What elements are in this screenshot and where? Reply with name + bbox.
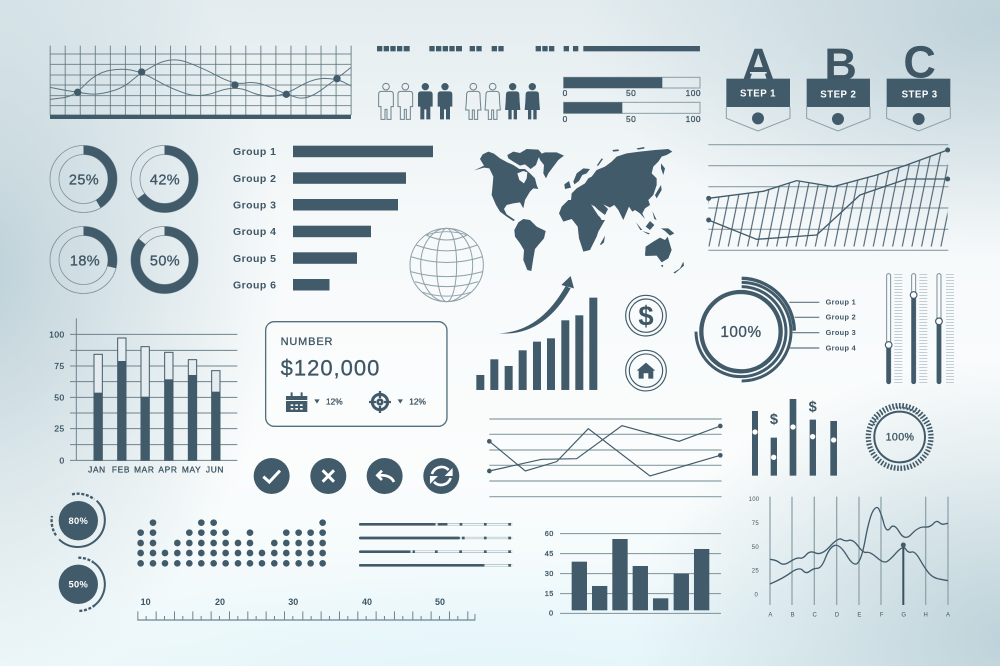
donut 50%	[131, 226, 198, 294]
australia	[645, 237, 672, 268]
scandinavia	[573, 168, 590, 184]
donut 18%: 18%	[70, 254, 100, 270]
horizontal group bar chart: Group 1	[233, 146, 276, 158]
ruler scale: 30	[288, 597, 298, 607]
hatched area line chart	[706, 143, 950, 250]
crossing line chart	[487, 419, 723, 497]
ruler scale	[137, 597, 475, 620]
donut 18%	[50, 226, 117, 294]
smooth curve chart: 75	[752, 521, 759, 527]
arrow	[499, 276, 574, 334]
icon: men outlined	[379, 83, 413, 119]
growth bar chart with arrow	[476, 276, 597, 390]
column dots 9 to 12	[235, 529, 278, 567]
eurasia africa oceania	[559, 147, 684, 273]
progress bars 0 50 100: 50	[626, 88, 636, 98]
donut 42%	[131, 146, 198, 212]
people pictogram	[379, 83, 540, 119]
stacked monthly bar chart: 0	[60, 455, 65, 465]
number card: NUMBER	[281, 336, 333, 348]
radial 100 percent chart with groups: Group 1	[826, 298, 856, 307]
number card: 12%	[326, 397, 343, 407]
column dots 5 to 8	[186, 519, 229, 567]
radial tick gauge 100 percent: 100%	[886, 432, 914, 444]
dollar bar chart: $	[809, 399, 817, 415]
horizontal group bar chart: Group 6	[233, 280, 276, 292]
column bar chart 0 to 60: 45	[545, 549, 554, 558]
stacked monthly bar chart: 100	[49, 329, 65, 339]
small percent circles	[52, 494, 105, 611]
north america	[474, 152, 538, 221]
smooth curve chart: A	[768, 613, 772, 619]
donut charts	[50, 146, 198, 294]
donut 50%: 50%	[150, 254, 180, 270]
step C: STEP 3	[902, 89, 938, 100]
icon: calendar	[286, 392, 307, 412]
kamchatka and japan	[655, 163, 665, 198]
donut 25%: 25%	[69, 172, 99, 188]
step C	[887, 37, 950, 131]
stacked monthly bar chart: MAY	[182, 464, 201, 474]
donut 42%: 42%	[150, 172, 180, 188]
dollar bar chart	[752, 399, 837, 476]
ruler scale: 40	[362, 597, 372, 607]
stacked monthly bar chart: MAR	[134, 464, 155, 474]
stacked monthly bar chart: JUN	[206, 464, 224, 474]
stacked monthly bar chart: FEB	[112, 464, 130, 474]
horizontal group bar chart: Group 3	[233, 200, 276, 212]
stacked monthly bar chart: APR	[158, 464, 178, 474]
horizontal group bar chart: Group 4	[233, 226, 276, 238]
round action buttons	[254, 458, 459, 494]
column bar chart 0 to 60	[545, 529, 721, 618]
world map	[474, 147, 684, 273]
donut 25%	[50, 146, 117, 212]
ruler scale: 20	[215, 597, 225, 607]
vertical sliders	[885, 274, 950, 384]
number card: $120,000	[281, 356, 380, 381]
british isles	[564, 181, 571, 189]
madagascar	[600, 236, 605, 245]
smooth curve chart: A	[946, 613, 950, 619]
icon: women filled	[505, 83, 540, 119]
step B: B	[824, 39, 857, 90]
smooth curve chart: F	[880, 613, 884, 619]
ruler scale: 10	[141, 597, 151, 607]
progress bars 0 50 100: 0	[563, 114, 568, 124]
step B	[807, 39, 870, 131]
icon: refresh	[423, 458, 459, 494]
radial 100 percent chart with groups: Group 3	[826, 328, 856, 337]
smooth curve chart: 50	[752, 545, 759, 551]
smooth curve chart: E	[857, 613, 861, 619]
column bar chart 0 to 60: 0	[549, 609, 554, 618]
step A: STEP 1	[740, 88, 776, 99]
smooth curve chart: D	[835, 613, 840, 619]
smooth curve chart: 25	[752, 569, 759, 575]
progress bars 0 50 100: 100	[686, 114, 701, 124]
top row squares and progress strip	[377, 46, 700, 51]
icon: men filled	[418, 83, 452, 119]
horizontal progress sliders	[359, 523, 512, 567]
icon: home coin	[626, 350, 666, 391]
icon: women outlined	[466, 83, 500, 119]
radial 100 percent chart with groups	[696, 278, 857, 381]
radial 100 percent chart with groups: 100%	[720, 324, 762, 341]
number card: 12%	[409, 397, 427, 407]
top line chart with grid	[50, 54, 352, 119]
progress bars 0 50 100	[563, 77, 701, 124]
smooth curve chart: 100	[749, 497, 760, 503]
dollar bar chart: $	[770, 412, 778, 428]
wireframe globe	[410, 228, 483, 302]
step C: C	[903, 37, 936, 88]
smooth curve chart: 0	[755, 592, 759, 598]
ruler scale: 50	[435, 597, 445, 607]
horizontal group bar chart: Group 5	[233, 253, 276, 265]
new zealand	[673, 262, 684, 273]
stacked monthly bar chart: 50	[54, 392, 65, 402]
number card	[266, 322, 447, 426]
eurasia and africa	[559, 149, 672, 252]
south america	[514, 219, 546, 271]
icon: target	[369, 391, 391, 413]
coin icons	[626, 295, 666, 391]
step A	[726, 39, 790, 131]
progress bars 0 50 100: 50	[626, 114, 636, 124]
circle 50%: 50%	[68, 580, 89, 590]
column dots 13 to 16	[283, 519, 326, 567]
stacked monthly bar chart: JAN	[88, 464, 106, 474]
smooth curve chart: H	[923, 613, 928, 619]
horizontal group bar chart: Group 2	[233, 173, 276, 185]
arctic islands	[507, 149, 542, 169]
stacked monthly bar chart	[49, 318, 237, 474]
circle 80%: 80%	[68, 516, 89, 526]
stacked monthly bar chart: 75	[54, 361, 65, 371]
red sea and gulf	[591, 204, 610, 219]
column dots 1 to 4	[137, 519, 181, 567]
smooth curve chart	[749, 497, 950, 619]
northern islands	[597, 147, 644, 166]
greenland	[538, 152, 564, 178]
horizontal group bar chart	[233, 146, 433, 292]
icon: check	[254, 458, 290, 494]
icon: back arrow	[367, 458, 403, 494]
step badges	[726, 37, 950, 131]
column bar chart 0 to 60: 15	[545, 589, 554, 598]
icon: cross	[310, 458, 346, 494]
smooth curve chart: B	[791, 613, 795, 619]
dot matrix chart	[137, 519, 326, 567]
radial 100 percent chart with groups: Group 2	[826, 313, 856, 322]
americas and greenland	[474, 149, 564, 271]
radial 100 percent chart with groups: Group 4	[826, 343, 857, 352]
step B: STEP 2	[820, 89, 856, 100]
icon: dollar coin: $	[638, 300, 654, 331]
radial tick gauge 100 percent	[868, 406, 931, 468]
progress bars 0 50 100: 0	[563, 88, 568, 98]
column bar chart 0 to 60: 30	[545, 569, 554, 578]
asian islands	[636, 211, 674, 236]
smooth curve chart: G	[901, 613, 906, 619]
step A: A	[742, 39, 775, 90]
stacked monthly bar chart: 25	[54, 424, 65, 434]
column bar chart 0 to 60: 60	[545, 529, 554, 538]
smooth curve chart: C	[812, 613, 817, 619]
progress bars 0 50 100: 100	[686, 88, 701, 98]
